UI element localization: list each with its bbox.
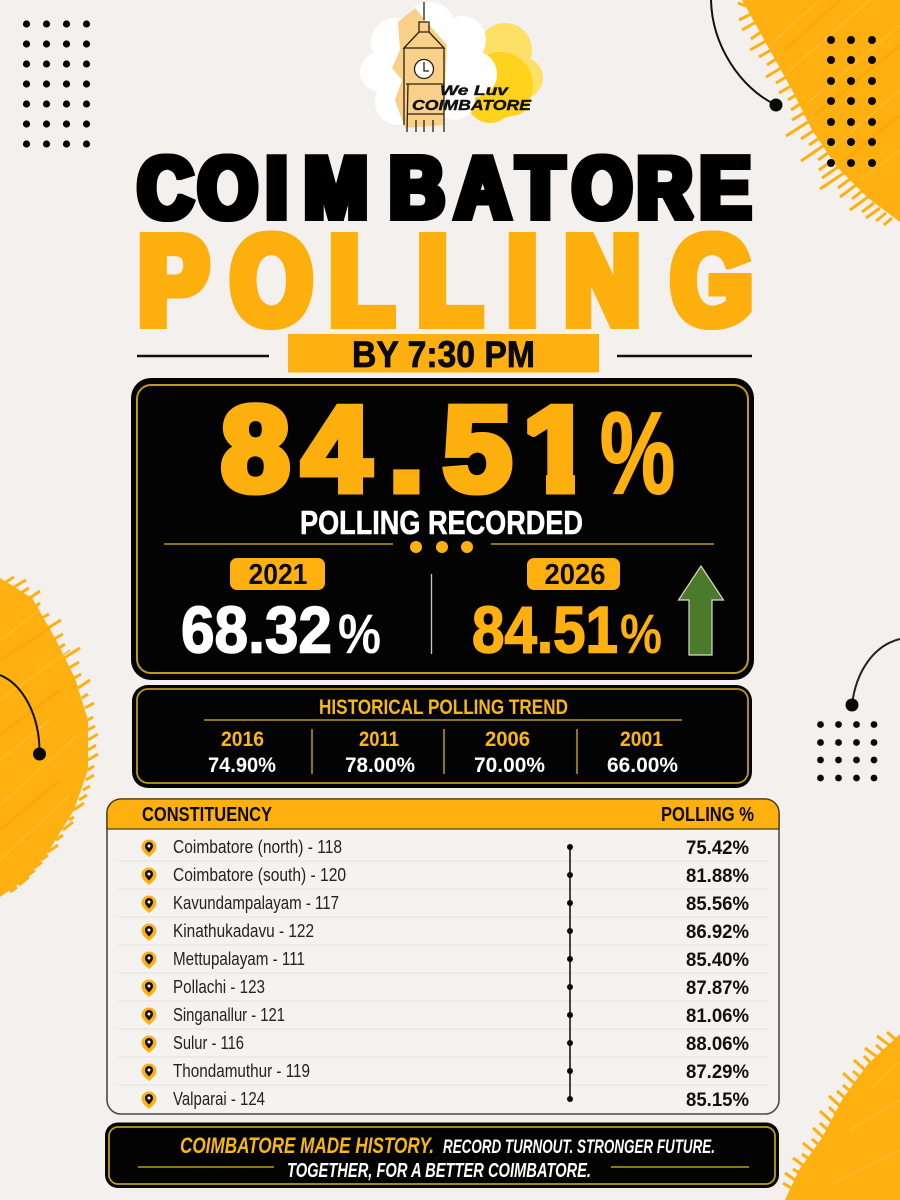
row: Kavundampalayam [142, 893, 749, 915]
row: Mettupalayam [142, 949, 749, 971]
divider with dots [164, 541, 714, 553]
dot grid: top right [827, 36, 876, 167]
row: Coimbatore (south) [142, 865, 749, 887]
2026 badge: 2026 [544, 559, 606, 591]
arc: left [0, 675, 46, 760]
headline percent sign: % [600, 388, 675, 518]
row: Valparai [142, 1089, 749, 1111]
trend 2016 [208, 728, 276, 777]
logo: We Luv Coimbatore: We Luv [440, 82, 510, 98]
row: Mettupalayam: Mettupalayam - 111 [173, 949, 305, 969]
2026 value: % [620, 602, 662, 665]
arc: top right [711, 0, 782, 112]
subtitle bar: by 7:30 PM: BY 7:30 PM [352, 334, 535, 375]
table header: CONSTITUENCY [142, 804, 273, 826]
title: POLLING: POLLING [139, 211, 752, 351]
trend heading: HISTORICAL POLLING TREND [319, 696, 568, 719]
2021 value: 68.32 [181, 592, 332, 666]
row: Pollachi: Pollachi - 123 [173, 977, 265, 997]
row: Singanallur [142, 1005, 749, 1027]
row: Valparai: 85.15% [686, 1090, 749, 1111]
subtitle bar: by 7:30 PM [137, 334, 752, 375]
row: Pollachi [142, 977, 749, 999]
row: Sulur [142, 1033, 749, 1055]
trend 2006 [474, 728, 545, 777]
row: Kinathukadavu: Kinathukadavu - 122 [173, 921, 314, 941]
row: Thondamuthur: Thondamuthur - 119 [173, 1061, 310, 1081]
trend 2011 [345, 728, 415, 777]
row: Pollachi: 87.87% [686, 978, 749, 999]
dot grid: middle right [817, 721, 877, 781]
panel: headline polling figure [131, 378, 754, 680]
brush stroke: bottom right [783, 1032, 900, 1200]
brush stroke: top right [738, 0, 900, 225]
logo: We Luv Coimbatore: COIMBATORE [412, 97, 532, 114]
title: COIMBATORE: COIMBATORE [138, 140, 751, 237]
row: Mettupalayam: 85.40% [686, 950, 749, 971]
row: Valparai: Valparai - 124 [173, 1089, 265, 1109]
dot grid: top left [23, 20, 90, 148]
row: Singanallur: Singanallur - 121 [173, 1005, 285, 1025]
row: Kavundampalayam: Kavundampalayam - 117 [173, 893, 339, 913]
trend 2001: 66.00% [607, 754, 678, 777]
footer headline: COIMBATORE MADE HISTORY. [180, 1133, 434, 1158]
trend 2006: 70.00% [474, 754, 545, 777]
timeline spine [567, 844, 573, 1102]
polling recorded label: POLLING RECORDED [300, 504, 583, 541]
trend 2016: 2016 [221, 728, 264, 751]
2021 badge: 2021 [248, 559, 308, 591]
row: Sulur: Sulur - 116 [173, 1033, 244, 1053]
logo: We Luv Coimbatore [360, 2, 543, 132]
row: Thondamuthur [142, 1061, 749, 1083]
row: Coimbatore (south): Coimbatore (south) - 120 [173, 865, 346, 885]
row: Coimbatore (north) [142, 837, 749, 859]
trend 2016: 74.90% [208, 754, 276, 777]
panel: constituency table [107, 799, 779, 1114]
trend 2001: 2001 [620, 728, 663, 751]
2021 value: % [338, 602, 381, 665]
table header [107, 799, 779, 829]
row: Coimbatore (north): Coimbatore (north) - 118 [173, 837, 342, 857]
footer tagline: RECORD TURNOUT. STRONGER FUTURE. [443, 1137, 715, 1158]
2026 badge [527, 558, 620, 591]
2026 value: 84.51 [472, 592, 618, 666]
trend 2011: 2011 [359, 728, 399, 751]
row: Sulur: 88.06% [686, 1034, 749, 1055]
brush stroke: left [0, 577, 98, 897]
arc: middle right [846, 639, 900, 712]
headline number: 84.51 [222, 381, 591, 517]
row: Singanallur: 81.06% [686, 1006, 749, 1027]
row: Kinathukadavu: 86.92% [686, 922, 749, 943]
footer closing line: TOGETHER, FOR A BETTER COIMBATORE. [287, 1160, 591, 1182]
trend 2011: 78.00% [345, 754, 415, 777]
table header: POLLING % [661, 804, 754, 826]
row: Coimbatore (south): 81.88% [686, 866, 749, 887]
row: Coimbatore (north): 75.42% [686, 838, 749, 859]
trend 2006: 2006 [485, 728, 530, 751]
trend 2001 [607, 728, 678, 777]
footer banner [105, 1122, 779, 1188]
row: Thondamuthur: 87.29% [686, 1062, 749, 1083]
row: Kavundampalayam: 85.56% [686, 894, 749, 915]
panel: historical polling trend [132, 685, 752, 788]
2021 badge [230, 558, 325, 591]
row: Kinathukadavu [142, 921, 749, 943]
icon: green up arrow [678, 566, 724, 655]
